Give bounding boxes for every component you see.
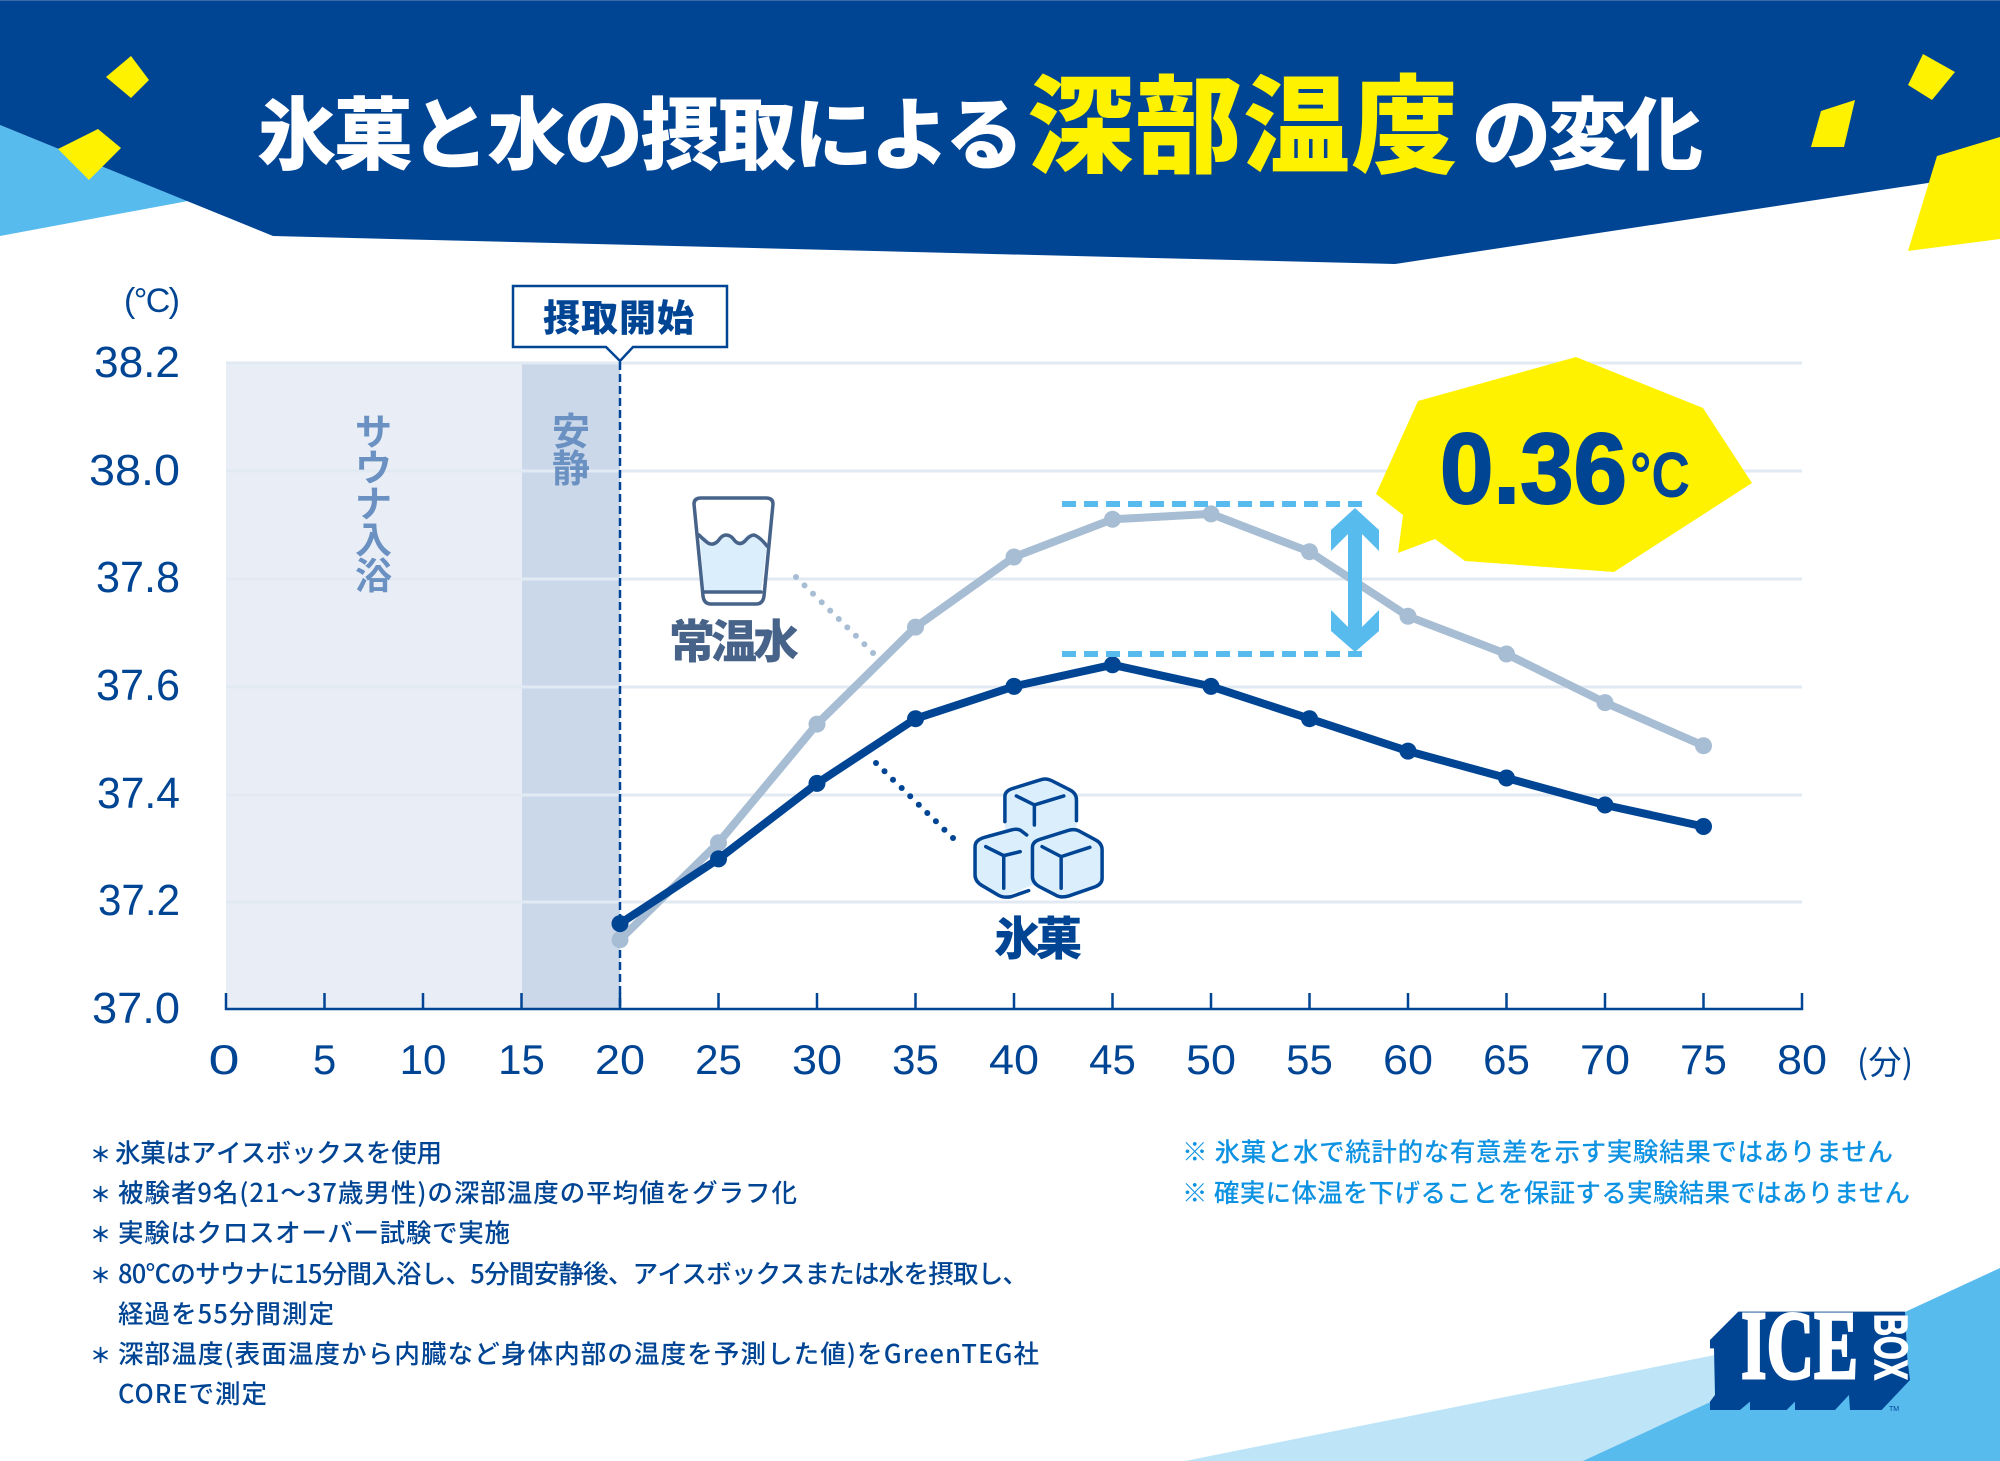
- x axis labels: 55: [1286, 1036, 1333, 1083]
- x axis labels: 10: [400, 1036, 446, 1083]
- label: rest: 静: [552, 438, 590, 493]
- footnotes: disclaimers: ※ 確実に体温を下げることを保証する実験結果ではありません: [1182, 1173, 1910, 1210]
- footnotes: study conditions: ＊: [90, 1139, 111, 1169]
- title: [257, 40, 1703, 195]
- y axis labels: 37.8: [96, 553, 180, 602]
- label: ice slurry: 氷菓: [994, 903, 1082, 969]
- dotted leader: ice: [873, 760, 956, 841]
- footnotes: study conditions: 氷菓はアイスボックスを使用: [115, 1133, 442, 1170]
- footnotes: disclaimers: ※ 氷菓と水で統計的な有意差を示す実験結果ではありません: [1182, 1132, 1893, 1169]
- title: 深部温度: [1027, 40, 1458, 195]
- callout: difference 0.36°C: °C: [1630, 439, 1690, 511]
- footnotes: disclaimers: [1182, 1132, 1910, 1210]
- line series: ice slurry: [612, 656, 1712, 932]
- label: sauna bathing: ウ: [355, 438, 392, 492]
- footnotes: study conditions: ＊: [90, 1219, 111, 1249]
- title: の変化: [1472, 71, 1703, 186]
- footnotes: study conditions: 経過を55分間測定: [118, 1294, 334, 1331]
- intake start dashed line: [619, 362, 621, 1009]
- footnotes: study conditions: 被験者9名(21〜37歳男性)の深部温度の平均値をグラフ化: [118, 1173, 797, 1210]
- x axis unit: (分): [1857, 1036, 1913, 1084]
- x axis labels: 65: [1483, 1036, 1530, 1083]
- callout: intake start: [513, 286, 727, 361]
- y axis labels: 38.2: [94, 338, 180, 387]
- yellow confetti shapes: [58, 54, 2000, 251]
- footnotes: study conditions: [90, 1133, 1039, 1411]
- x axis labels: 0: [208, 1036, 240, 1083]
- y axis labels: 37.0: [92, 984, 180, 1033]
- x axis labels: 15: [498, 1036, 545, 1083]
- dotted leader: water: [793, 574, 876, 656]
- callout: intake start: 摂取開始: [543, 288, 694, 342]
- double arrow: [1331, 508, 1379, 652]
- logo: ICE BOX: BOX: [1865, 1314, 1917, 1380]
- y axis unit: (°C): [124, 282, 180, 320]
- label: rest: 安: [552, 401, 590, 456]
- y axis labels: [89, 338, 180, 1033]
- x axis labels: 70: [1580, 1036, 1630, 1083]
- x axis labels: 35: [892, 1036, 939, 1083]
- logo: ICE BOX: TM: [1889, 1406, 1899, 1413]
- footnotes: study conditions: ＊: [90, 1340, 111, 1370]
- bottom decorative light triangle: [1185, 1352, 1900, 1461]
- x axis labels: 20: [595, 1036, 645, 1083]
- line series: room-temperature water: [612, 505, 1712, 948]
- x axis labels: 30: [792, 1036, 842, 1083]
- shaded period: rest: [522, 363, 620, 1009]
- footnotes: study conditions: 80℃のサウナに15分間入浴し、5分間安静後、アイスボックスまたは水を摂取し、: [118, 1254, 1028, 1291]
- dashed range lines: [1062, 504, 1362, 654]
- label: room-temperature water: 常温水: [669, 606, 799, 672]
- label: sauna bathing: ナ: [355, 474, 392, 528]
- footnotes: study conditions: COREで測定: [118, 1374, 267, 1411]
- label: sauna bathing: サ: [355, 402, 392, 456]
- callout: difference 0.36°C: 0.36: [1440, 413, 1627, 525]
- x axis labels: 50: [1186, 1036, 1236, 1083]
- footnotes: study conditions: ＊: [90, 1260, 111, 1290]
- y axis labels: 37.6: [96, 661, 180, 710]
- footnotes: study conditions: 実験はクロスオーバー試験で実施: [118, 1213, 510, 1250]
- y axis labels: 37.4: [97, 769, 180, 818]
- x axis labels: [208, 1036, 1827, 1083]
- title: 氷菓と水の摂取による: [257, 71, 1024, 186]
- icon: glass of water: [694, 498, 773, 604]
- footnotes: study conditions: ＊: [90, 1179, 111, 1209]
- label: sauna bathing: 浴: [355, 546, 392, 600]
- bottom decorative blue triangle: [1583, 1268, 2000, 1461]
- y axis labels: 38.0: [89, 446, 180, 495]
- grid lines: [226, 363, 1802, 902]
- x axis labels: 45: [1089, 1036, 1136, 1083]
- x axis labels: 80: [1777, 1036, 1827, 1083]
- x axis labels: 60: [1383, 1036, 1433, 1083]
- callout: difference 0.36°C: [1376, 357, 1752, 572]
- footnotes: study conditions: 深部温度(表面温度から内臓など身体内部の温度を予測した値)をGreenTEG社: [118, 1334, 1039, 1371]
- icon: ice cubes: [975, 778, 1102, 897]
- header banner: [0, 0, 2000, 264]
- x axis labels: 40: [989, 1036, 1039, 1083]
- x axis labels: 25: [695, 1036, 742, 1083]
- y axis labels: 37.2: [98, 876, 180, 925]
- x axis labels: 75: [1680, 1036, 1727, 1083]
- shaded period: sauna bathing: [226, 363, 522, 1009]
- left light-blue wedge: [0, 125, 188, 236]
- logo: ICE BOX: ICE: [1741, 1292, 1858, 1400]
- x axis labels: 5: [313, 1036, 336, 1083]
- x axis line and ticks: [226, 993, 1802, 1009]
- label: sauna bathing: 入: [355, 510, 392, 564]
